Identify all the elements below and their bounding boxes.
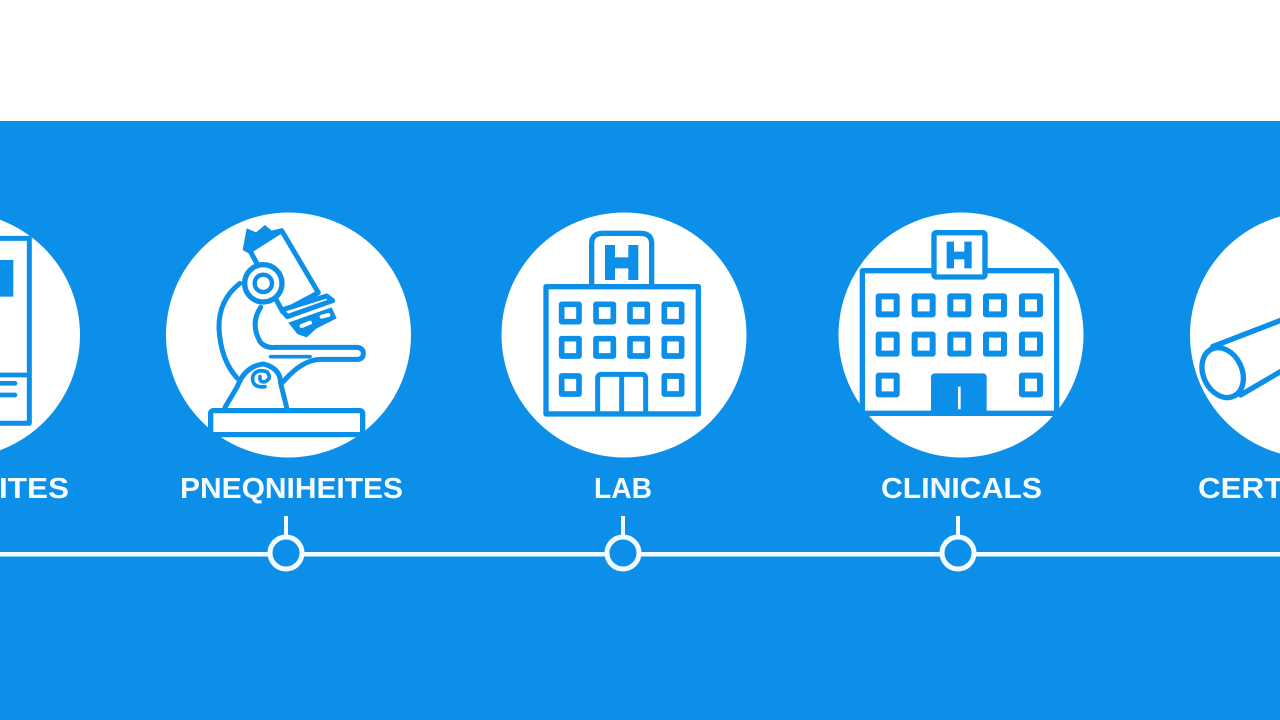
label: lab: LAB [594, 473, 652, 505]
node: prerequisites [270, 516, 302, 569]
icon: rolled certificate [1194, 319, 1280, 404]
timeline [0, 516, 1280, 569]
icon: hospital with arched tower [546, 233, 698, 414]
panel: cropped prerequisites step, left edge [0, 212, 80, 505]
label: ites: ITES [0, 473, 69, 505]
node: clinicals [942, 516, 974, 569]
label: prerequisites: PNEQNIHEITES [180, 473, 403, 505]
node: lab [607, 516, 639, 569]
panel: clinicals step [838, 212, 1084, 505]
label: clinicals: CLINICALS [881, 473, 1042, 505]
panel: prerequisites step [166, 212, 411, 505]
icon: document form [0, 238, 29, 423]
panel: cropped certification step, right edge [1190, 212, 1280, 505]
icon: microscope [211, 225, 363, 435]
icon: hospital with door [862, 233, 1057, 413]
panel: lab step [502, 212, 746, 505]
